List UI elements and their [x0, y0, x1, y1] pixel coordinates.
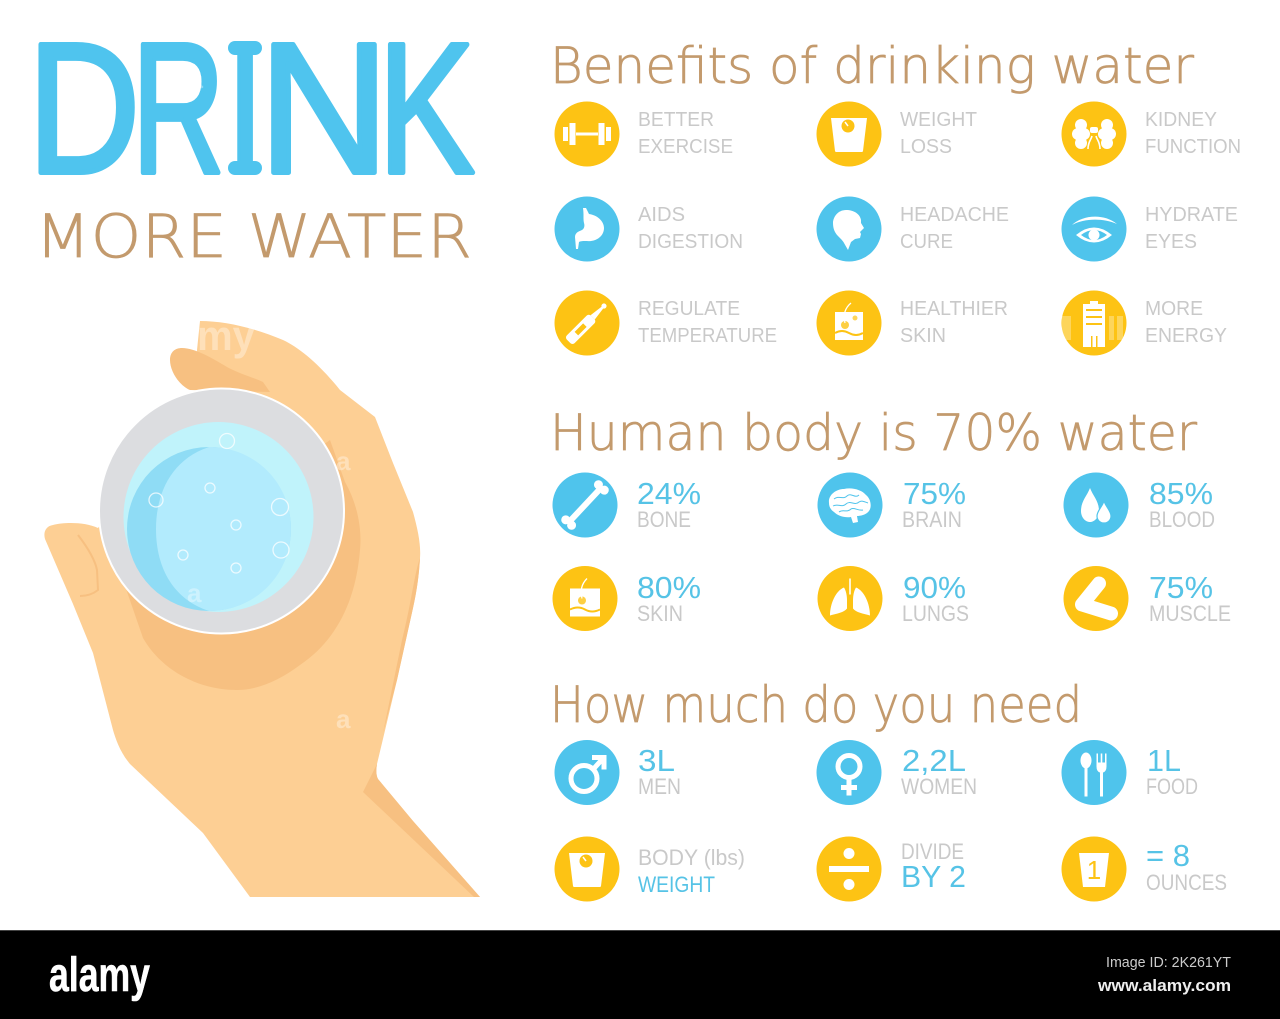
title: DRINK: a [191, 63, 203, 94]
value: BY 2 [901, 859, 966, 894]
footer image id: Image ID: 2K261YT [1106, 954, 1231, 971]
watermark marks: my [197, 312, 256, 359]
label: DIGESTION [638, 231, 743, 253]
subtitle: more water: MORE WATER [35, 202, 472, 272]
item: healthier skin [816, 290, 1008, 356]
label [638, 298, 777, 347]
bubbles [149, 434, 289, 573]
item: weight loss [816, 102, 977, 166]
icon: head [816, 196, 882, 262]
label: BODY (lbs) [638, 845, 745, 870]
watermark marks: a [187, 578, 202, 608]
item: kidney function [1062, 102, 1241, 166]
label: AIDS [638, 204, 685, 226]
icon: brain [818, 472, 882, 538]
item: divide by 2 [816, 836, 966, 902]
label [900, 298, 1008, 347]
item: blood [1064, 472, 1215, 538]
heading: how much: How much do you need [550, 676, 1082, 734]
watermark marks [187, 312, 351, 734]
label: HEALTHIER [900, 298, 1008, 320]
value: 2,2L [902, 743, 966, 778]
water light circle [156, 447, 291, 611]
item: body weight [554, 836, 745, 902]
item: women [816, 740, 977, 805]
hand shadow edges [363, 558, 480, 897]
label: EXERCISE [638, 136, 733, 158]
label: WEIGHT [900, 109, 977, 131]
icon: stomach [554, 196, 620, 262]
icon: cutlery [1062, 740, 1126, 805]
item: muscle [1064, 566, 1231, 631]
icon: bone [552, 472, 618, 538]
label: KIDNEY [1145, 109, 1217, 131]
item: aids digestion [554, 196, 743, 262]
title: DRINK [28, 4, 475, 213]
item: lungs [818, 566, 969, 631]
label: REGULATE [638, 298, 740, 320]
icon: skin [552, 566, 618, 631]
label: FUNCTION [1145, 136, 1241, 158]
label [900, 204, 1009, 253]
label: WOMEN [901, 774, 977, 799]
value: 90% [903, 570, 966, 605]
icon: glass [1062, 836, 1126, 902]
watermark marks: a [336, 446, 351, 476]
label [638, 204, 743, 253]
label: MUSCLE [1149, 601, 1231, 626]
label: SKIN [637, 601, 683, 626]
icon: arm [1064, 566, 1128, 631]
icon: lungs [818, 566, 882, 631]
label: LOSS [900, 136, 952, 158]
title: DRINK: R [132, 4, 225, 212]
value: 85% [1149, 476, 1213, 511]
item: better exercise [554, 102, 733, 166]
label: FOOD [1146, 774, 1198, 799]
glass rim [99, 388, 344, 634]
finger [170, 348, 270, 392]
label: TEMPERATURE [638, 325, 777, 347]
icon: scale [816, 102, 882, 166]
heading: human body: Human body is 70% water [550, 404, 1197, 462]
item: men [554, 740, 681, 805]
label [1145, 204, 1238, 253]
label: BLOOD [1149, 507, 1215, 532]
label: DIVIDE [901, 839, 964, 864]
icon: female [816, 740, 882, 805]
icon: thermometer [554, 290, 620, 356]
item: skin [552, 566, 701, 631]
water dark circle [127, 447, 291, 611]
icon: battery [1062, 290, 1126, 356]
value: = 8 [1146, 838, 1190, 873]
watermark marks: a [336, 704, 351, 734]
label: CURE [900, 231, 953, 253]
footer bar [0, 930, 1280, 1019]
label: ENERGY [1145, 325, 1227, 347]
value: 80% [637, 570, 701, 605]
icon: glass: 1 [1087, 855, 1101, 885]
thumb nail [78, 535, 98, 596]
illustration: hand holding glass [44, 312, 480, 897]
label: BRAIN [902, 507, 962, 532]
label: HYDRATE [1145, 204, 1238, 226]
value: 75% [1149, 570, 1213, 605]
value: 3L [638, 743, 675, 778]
title: DRINK: D [28, 5, 140, 213]
value: 75% [903, 476, 966, 511]
value: 24% [637, 476, 701, 511]
title: DRINK: N [259, 4, 389, 212]
item: brain [818, 472, 966, 538]
label: BONE [637, 507, 691, 532]
icon: dumbbell [554, 102, 620, 166]
hand [44, 321, 480, 897]
icon: divide [816, 836, 882, 902]
label [1145, 298, 1227, 347]
icon: eye [1062, 196, 1126, 262]
heading: benefits: Benefits of drinking water [550, 37, 1194, 95]
value: 1L [1147, 743, 1181, 778]
water [124, 422, 314, 612]
label: OUNCES [1146, 870, 1227, 895]
label: SKIN [900, 325, 946, 347]
label [638, 109, 733, 158]
footer url: www.alamy.com [1097, 976, 1231, 995]
label: LUNGS [902, 601, 969, 626]
label [1145, 109, 1241, 158]
label [900, 109, 977, 158]
shadow under glass [125, 440, 360, 690]
label: HEADACHE [900, 204, 1009, 226]
label: EYES [1145, 231, 1197, 253]
label: BETTER [638, 109, 714, 131]
item: bone [552, 472, 701, 538]
icon: skin [816, 290, 882, 356]
title: DRINK: K [378, 5, 475, 213]
title: DRINK: I [227, 6, 263, 213]
item: ounces [1062, 836, 1227, 902]
item: headache cure [816, 196, 1009, 262]
icon: scale [554, 836, 620, 902]
item: hydrate eyes [1062, 196, 1238, 262]
item: food [1062, 740, 1198, 805]
icon: kidneys [1062, 102, 1126, 166]
label accent: WEIGHT [638, 872, 715, 897]
label: MORE [1145, 298, 1203, 320]
icon: drops [1064, 472, 1128, 538]
footer logo: alamy [49, 949, 150, 1002]
item: more energy [1062, 290, 1227, 356]
item: regulate temperature [554, 290, 777, 356]
label: MEN [638, 774, 681, 799]
icon: male [554, 740, 620, 805]
